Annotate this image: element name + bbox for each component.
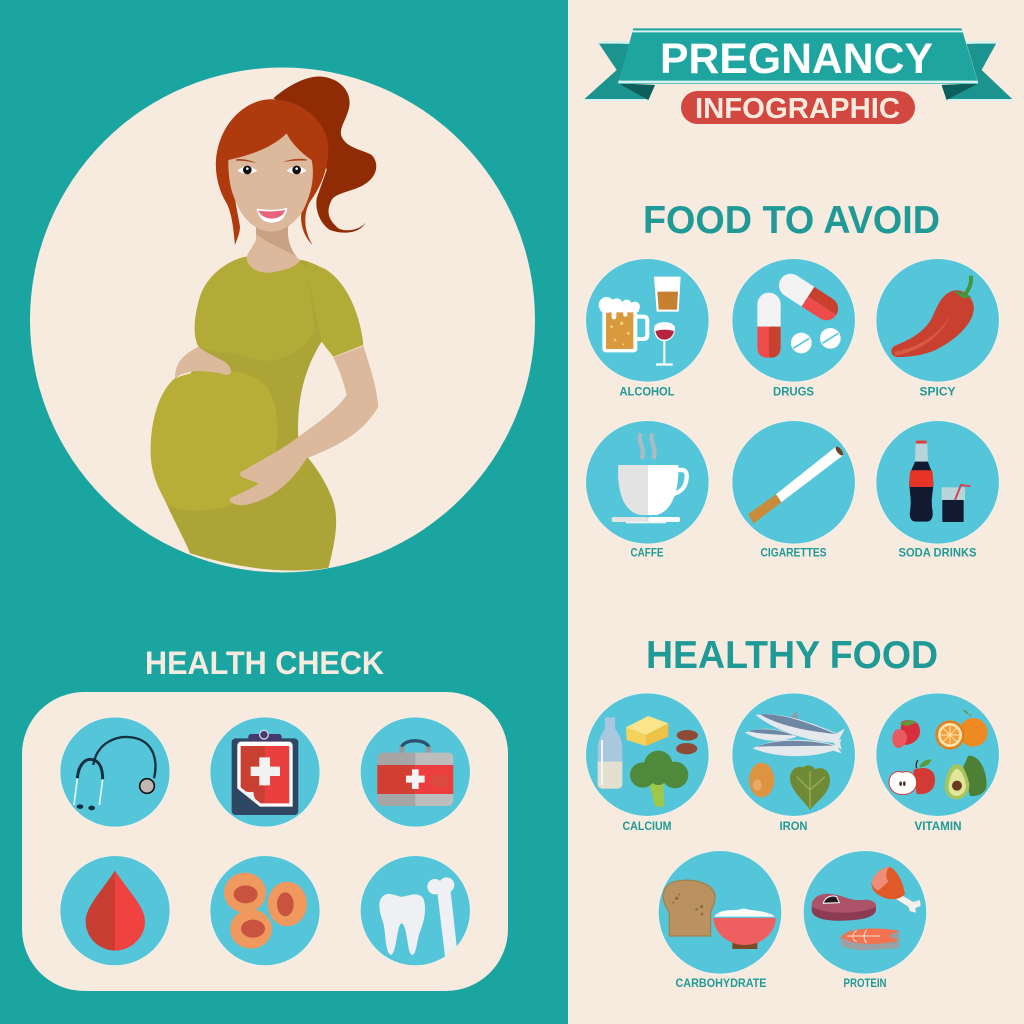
icon: drugs — [732, 259, 855, 382]
label: iron: IRON — [780, 819, 808, 833]
panel: healthy food — [586, 693, 999, 990]
heading: food to avoid: FOOD TO AVOID — [643, 199, 940, 242]
icon: blood cells — [210, 856, 320, 966]
panel: food to avoid — [586, 259, 999, 560]
icon: tooth and bone — [360, 856, 470, 970]
title: pregnancy: PREGNANCY — [660, 35, 933, 83]
label: caffe: CAFFE — [630, 546, 664, 560]
panel: right background — [568, 0, 1024, 1024]
label: drugs: DRUGS — [773, 384, 814, 398]
panel: left teal background — [0, 0, 568, 1024]
icon: calcium foods — [586, 693, 709, 816]
label: cigarettes: CIGARETTES — [760, 546, 826, 560]
heading: health check: HEALTH CHECK — [145, 645, 384, 681]
heading: healthy food: HEALTHY FOOD — [646, 634, 938, 677]
icon: coffee cup — [586, 421, 709, 544]
icon: first aid kit — [360, 717, 470, 827]
icon: iron foods — [732, 693, 855, 816]
icon: medical clipboard — [210, 717, 320, 827]
icon: protein foods — [803, 851, 927, 974]
label: protein: PROTEIN — [844, 976, 886, 990]
icon: cigarette — [732, 421, 855, 544]
panel: health check — [22, 692, 508, 991]
illustration: pregnant woman — [151, 77, 378, 570]
label: calcium: CALCIUM — [622, 819, 672, 833]
icon: carbohydrate foods — [658, 851, 782, 974]
title ribbon — [583, 28, 1013, 101]
label: spicy: SPICY — [920, 384, 956, 398]
icon: stethoscope — [60, 717, 170, 827]
label: soda drinks: SODA DRINKS — [898, 546, 976, 560]
label: carbohydrate: CARBOHYDRATE — [676, 976, 766, 990]
label: vitamin: VITAMIN — [914, 819, 962, 833]
icon: alcohol — [586, 259, 709, 382]
icon: chili pepper — [876, 259, 999, 382]
icon: blood drop — [60, 856, 170, 966]
subtitle pill: INFOGRAPHIC — [695, 93, 900, 125]
label: alcohol: ALCOHOL — [620, 384, 674, 398]
portrait circle — [30, 68, 535, 572]
icon: soda drinks — [876, 421, 999, 544]
icon: vitamin foods — [876, 693, 999, 816]
